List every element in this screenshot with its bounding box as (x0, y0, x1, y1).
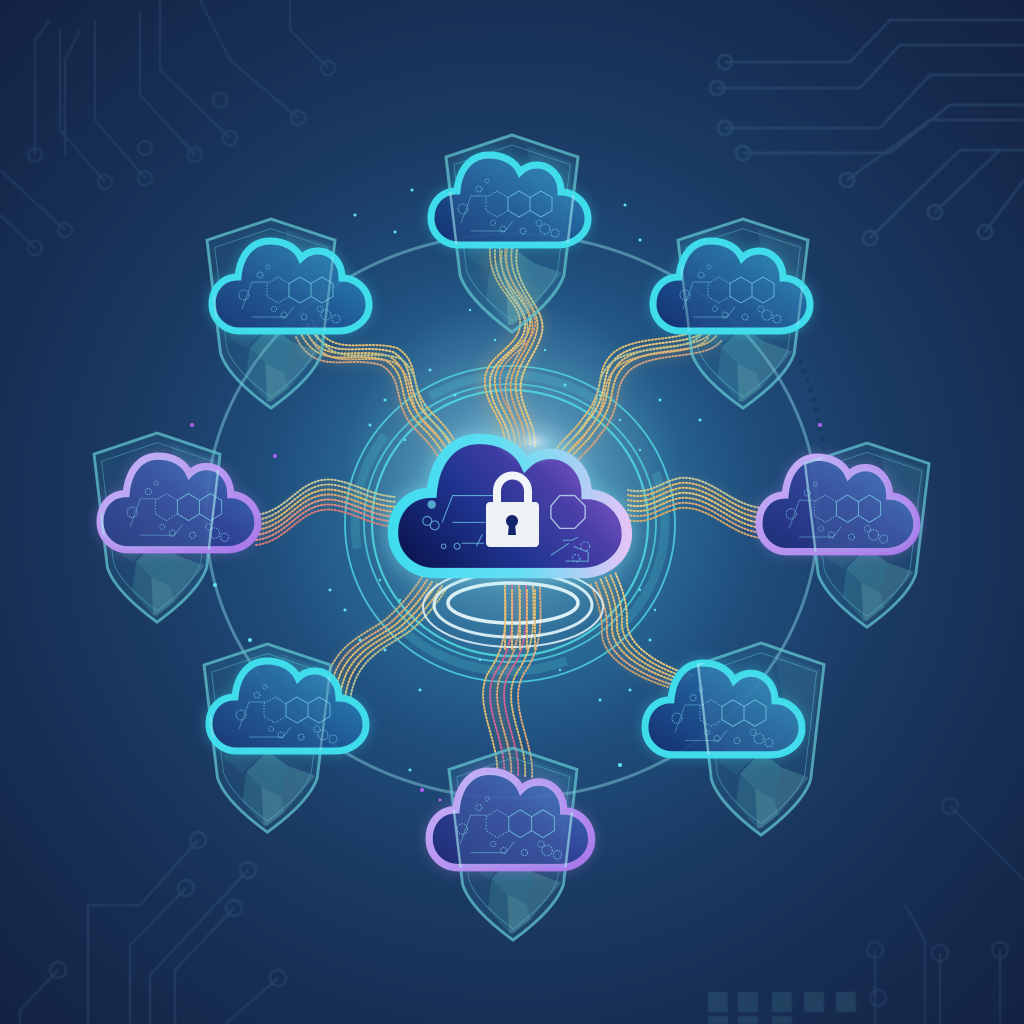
shield: bottom (449, 748, 577, 940)
circuit traces: bottom left (20, 832, 286, 1024)
icon: padlock (486, 475, 539, 547)
cloud: upper left (212, 241, 369, 331)
shield overlays clipped to clouds (100, 162, 916, 868)
stream: right cloud to hub (628, 478, 762, 538)
shield: right (805, 443, 929, 627)
decorative chip squares (708, 992, 856, 1024)
cloud: lower right (645, 663, 802, 755)
cloud: top (431, 155, 588, 245)
top flare (495, 418, 575, 466)
shield: lower right (698, 643, 824, 835)
central glow (342, 300, 682, 640)
shield: upper left (207, 219, 335, 408)
stream: bottom cloud to hub (483, 582, 541, 777)
stream: left cloud to hub (256, 480, 396, 545)
shield: top (446, 135, 578, 332)
cloud: right (759, 457, 917, 552)
stream: lower right cloud to hub (590, 572, 693, 687)
cloud: lower left (209, 661, 366, 751)
cloud: upper right (653, 241, 810, 331)
shield: upper right (678, 219, 808, 408)
data streams (256, 248, 762, 777)
cloud: left (100, 456, 258, 550)
circuit traces: top right (710, 20, 1024, 245)
floating particles (190, 188, 822, 802)
stream glow underlay (256, 248, 762, 775)
cloud: bottom (429, 771, 592, 868)
stream: top cloud to hub (485, 248, 542, 448)
circuit traces: bottom right (867, 798, 1024, 1024)
stream: upper left cloud to hub (296, 320, 461, 467)
central cloud (393, 439, 627, 573)
circuit details (423, 496, 590, 562)
stream: lower left cloud to hub (325, 577, 447, 701)
outer orbit ring (206, 234, 826, 798)
glowing base rings (423, 567, 603, 647)
circuit traces: top left (0, 0, 335, 255)
cloud body (393, 439, 627, 573)
shield: left (94, 433, 220, 622)
stream: upper right cloud to hub (554, 324, 721, 467)
hub rings (345, 366, 675, 682)
central stream overlay through base rings (505, 590, 535, 650)
shield: lower left (204, 644, 331, 832)
